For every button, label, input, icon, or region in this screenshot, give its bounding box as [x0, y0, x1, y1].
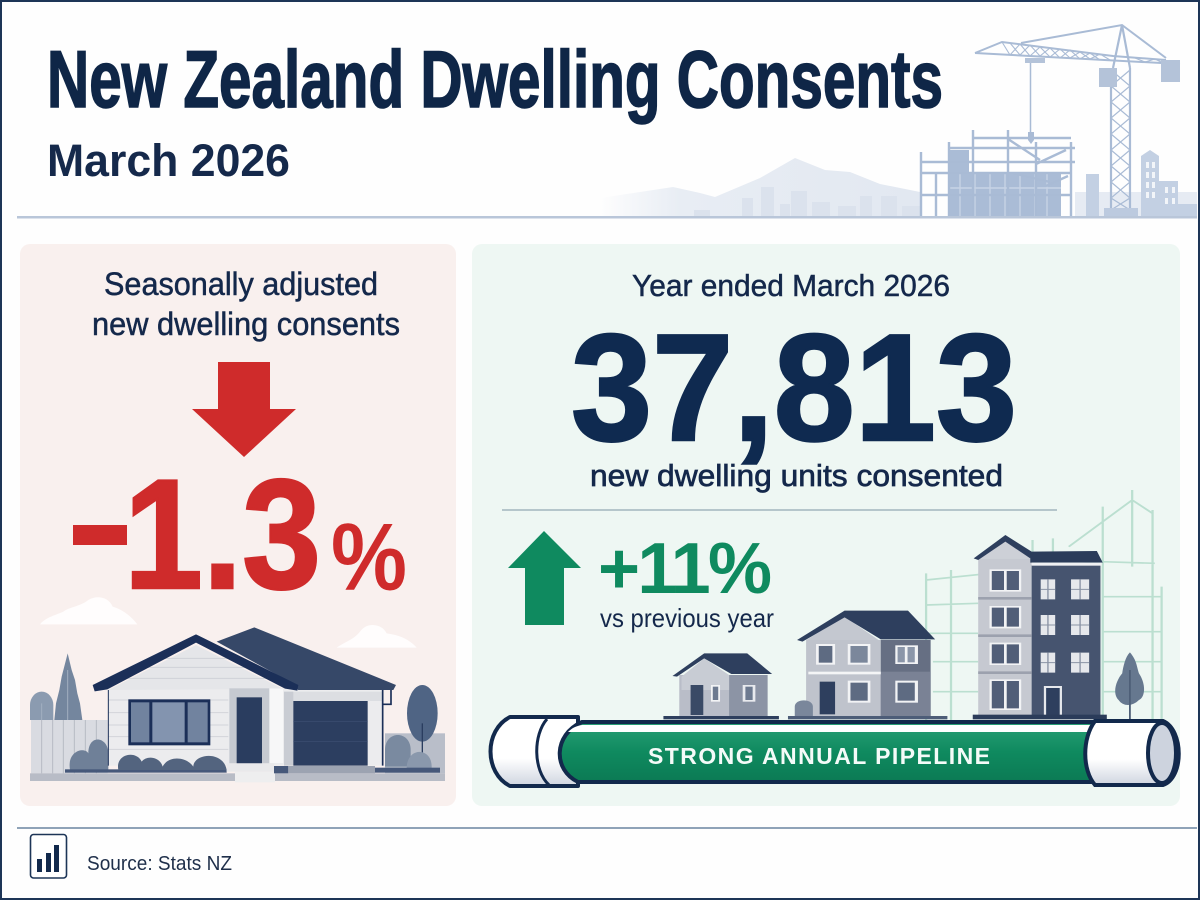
caption: new dwelling units consented: new dwelling units consented — [590, 458, 1003, 493]
big number: minus 1.3 percent: % — [331, 504, 407, 611]
panel: year ended March 2026 — [472, 244, 1180, 806]
icon: bar chart — [30, 834, 66, 878]
heading: seasonally adjusted: Seasonally adjusted — [104, 266, 378, 302]
subtitle: date: March 2026 — [47, 135, 290, 186]
source text: Source: Stats NZ — [87, 853, 232, 875]
pipeline banner — [490, 717, 1179, 786]
header illustration: skyline and construction crane — [600, 25, 1197, 216]
panel: seasonally adjusted monthly change — [20, 244, 456, 806]
heading: seasonally adjusted — [92, 266, 400, 342]
caption: vs previous year: vs previous year — [600, 603, 774, 633]
icon: red down arrow — [192, 362, 296, 457]
heading: seasonally adjusted: new dwelling consents — [92, 306, 400, 342]
big number: minus 1.3 percent — [73, 448, 407, 622]
icon: green up arrow — [508, 531, 581, 625]
illustration: scaffolding and homes — [663, 490, 1162, 720]
footer: source — [30, 834, 232, 878]
pipeline label: STRONG ANNUAL PIPELINE — [648, 743, 990, 769]
big number: 37,813: 37,813 — [571, 303, 1017, 473]
illustration: single family house — [30, 597, 445, 782]
heading: year ended: Year ended March 2026 — [632, 268, 950, 303]
stat: plus 11 percent: +11% — [598, 529, 772, 609]
big number: minus 1.3 percent: 1.3 — [124, 448, 321, 622]
